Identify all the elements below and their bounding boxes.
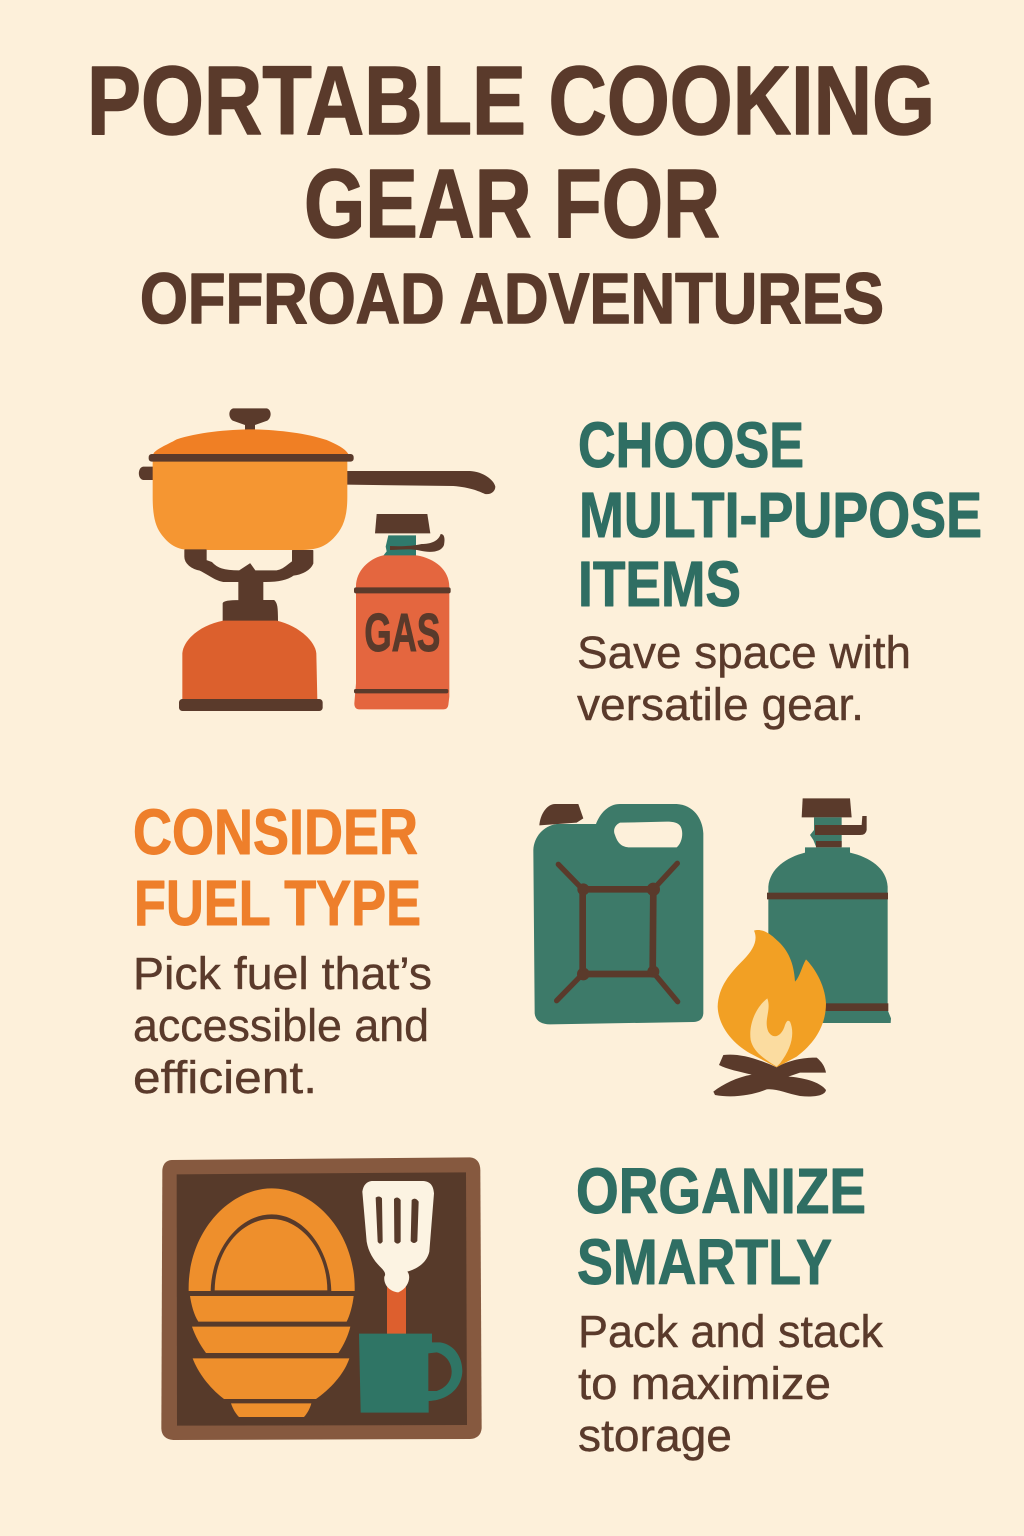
- canister body: [354, 555, 449, 709]
- text: organize smartly: SMARTLY: [577, 1226, 832, 1298]
- pot lid: [153, 429, 348, 454]
- stacked plates and bowls: [189, 1188, 355, 1417]
- text: consider fuel type: [133, 796, 432, 1103]
- canister label: GAS: [364, 604, 440, 663]
- canister neck: [383, 535, 416, 556]
- campfire: [713, 930, 826, 1096]
- spatula: [362, 1181, 434, 1335]
- text: organize smartly: storage: [578, 1410, 732, 1461]
- logs: [713, 1055, 826, 1096]
- text: choose multi-purpose items: ITEMS: [578, 548, 741, 620]
- bottle cap: [802, 798, 852, 817]
- pot left knob: [139, 467, 153, 480]
- stove fuel base: [182, 621, 317, 700]
- text: consider fuel type: accessible and: [133, 1000, 429, 1051]
- tray interior: [177, 1172, 467, 1426]
- text: choose multi-purpose items: Save space with: [577, 627, 911, 678]
- title: GEAR FOR: [304, 149, 720, 258]
- spatula head: [362, 1181, 434, 1292]
- jerry can: [533, 804, 703, 1024]
- text: choose multi-purpose items: CHOOSE: [578, 409, 804, 481]
- icon: storage tray with dishes, spatula and mug: [161, 1157, 482, 1440]
- plate: [189, 1188, 355, 1291]
- bottle neck: [810, 817, 842, 847]
- text: consider fuel type: FUEL TYPE: [134, 867, 421, 939]
- bowls: [190, 1296, 354, 1322]
- jerry can embossing: [557, 863, 678, 1002]
- text: organize smartly: Pack and stack: [578, 1306, 883, 1357]
- text: organize smartly: [576, 1155, 883, 1461]
- pot handle: [347, 471, 495, 494]
- pot body: [153, 461, 347, 550]
- text: choose multi-purpose items: versatile gear.: [577, 679, 864, 730]
- text: consider fuel type: efficient.: [133, 1052, 317, 1103]
- jerry can body: [533, 804, 703, 1024]
- text: consider fuel type: CONSIDER: [133, 796, 418, 868]
- canister cap: [375, 514, 430, 533]
- title: [87, 46, 935, 339]
- gas bottle: [767, 798, 891, 1023]
- inner flame: [750, 998, 792, 1067]
- mug: [359, 1334, 462, 1413]
- icon: pot on camp stove with gas canister: [139, 408, 495, 711]
- pot lid knob: [229, 408, 271, 433]
- spatula handle: [387, 1287, 406, 1335]
- text: choose multi-purpose items: [577, 409, 982, 730]
- text: organize smartly: to maximize: [578, 1358, 831, 1409]
- text: organize smartly: ORGANIZE: [576, 1155, 866, 1227]
- gas canister: [354, 514, 451, 709]
- icon: jerry can, gas bottle and campfire: [533, 798, 891, 1096]
- jerry can cap: [539, 804, 583, 825]
- pot rim: [149, 454, 354, 462]
- bottle body: [768, 847, 891, 1023]
- title: OFFROAD ADVENTURES: [140, 260, 884, 339]
- text: consider fuel type: Pick fuel that’s: [133, 948, 432, 999]
- tray frame: [161, 1157, 482, 1440]
- stove pot supports: [185, 550, 313, 622]
- flame: [718, 930, 826, 1067]
